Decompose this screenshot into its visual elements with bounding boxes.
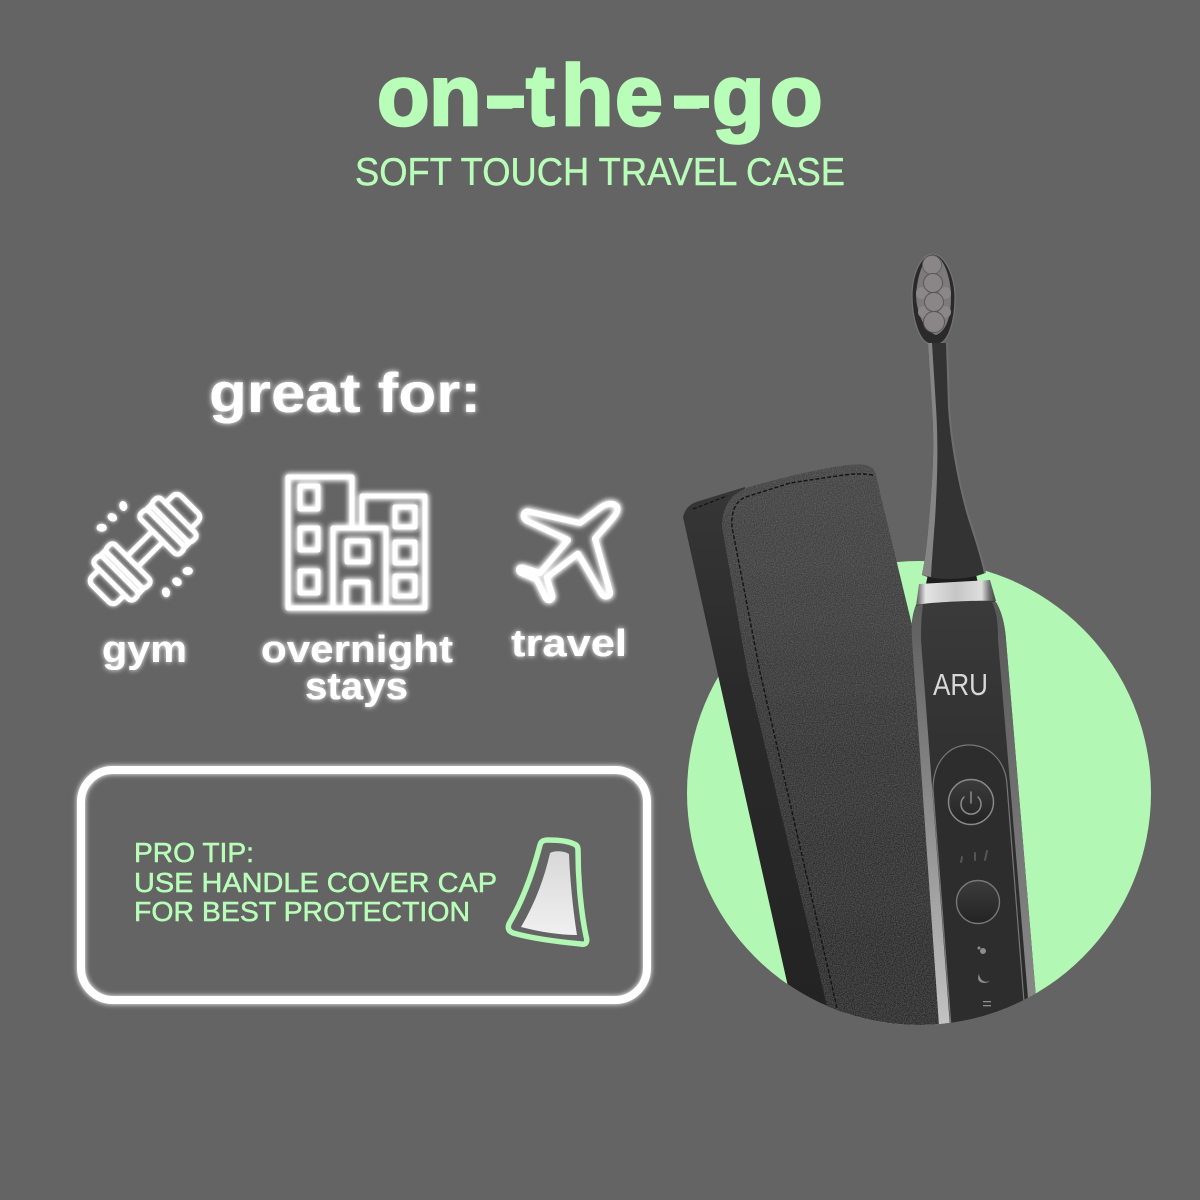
label: overnight stays: stays [305, 666, 408, 708]
speed indicator ticks [961, 851, 987, 862]
toothbrush [912, 254, 1037, 1040]
panel: pro tip [81, 770, 647, 1000]
case stitching [732, 474, 873, 1008]
brush head [912, 254, 955, 344]
case back stitching [693, 496, 727, 509]
brush neck [922, 343, 985, 579]
travel case [683, 464, 950, 1040]
icon: buildings [288, 477, 425, 608]
pro tip text: FOR BEST PROTECTION [134, 896, 470, 927]
icon: airplane [519, 504, 618, 600]
subtitle: SOFT TOUCH TRAVEL CASE [355, 151, 845, 194]
handle right metal strip [992, 602, 1037, 1010]
label: gym: gym [102, 629, 187, 671]
label: overnight stays [261, 629, 453, 708]
icon: handle cover cap [508, 840, 587, 944]
green circle [687, 561, 1151, 1025]
icon: dumbbell [81, 485, 209, 613]
handle left metal strip [912, 604, 951, 1040]
panel frame [81, 770, 647, 1000]
label: travel: travel [511, 623, 627, 665]
pro tip text [134, 837, 497, 927]
case front flap [722, 464, 950, 1040]
mode icons [978, 946, 991, 1006]
power button [948, 780, 994, 824]
control panel [933, 745, 1027, 1040]
label: overnight stays: overnight [261, 629, 453, 671]
metal ring [916, 580, 996, 606]
product: travel case and toothbrush [683, 254, 1037, 1040]
ring gap [926, 576, 978, 584]
logo: ARU [933, 667, 988, 702]
pro tip text: USE HANDLE COVER CAP [134, 867, 497, 898]
case back layer [683, 487, 850, 1040]
pro tip text: PRO TIP: [134, 837, 254, 868]
title: on-the-go [377, 48, 823, 144]
handle body [912, 601, 1037, 1040]
neck highlights [922, 343, 985, 577]
heading: great for: great for: [209, 361, 481, 424]
mode button [956, 880, 1000, 924]
